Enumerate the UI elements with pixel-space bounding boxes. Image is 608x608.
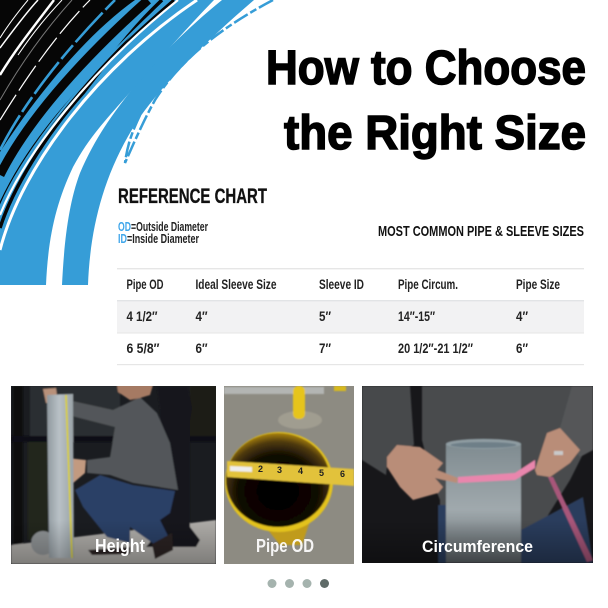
label: pipe OD: Pipe OD <box>256 536 314 556</box>
table header row: Pipe OD <box>126 277 164 292</box>
table row 6 inch: 6″ <box>196 341 208 356</box>
carousel dots <box>268 579 329 588</box>
table row 4 inch: 4″ <box>516 309 528 324</box>
legend: abbreviations: OD=Outside Diameter <box>118 220 208 234</box>
table row 6 inch: 6 5/8″ <box>126 341 160 356</box>
table: sizes <box>117 268 584 365</box>
table row 4 inch: 14″-15″ <box>398 309 435 324</box>
table row 6 inch: 7″ <box>319 341 331 356</box>
photo: measuring circumference <box>362 386 593 563</box>
tape digits: 4 <box>298 466 303 476</box>
table row 6 inch <box>126 341 528 356</box>
table header row <box>126 277 560 292</box>
title: the Right Size <box>284 107 586 160</box>
table row 4 inch: 5″ <box>319 309 331 324</box>
table header row: Sleeve ID <box>319 277 364 292</box>
legend: abbreviations <box>118 220 208 246</box>
background brush swoosh <box>0 0 273 285</box>
label: height: Height <box>95 536 145 556</box>
label: circumference: Circumference <box>422 537 533 556</box>
table row 6 inch: 6″ <box>516 341 528 356</box>
legend: abbreviations: ID=Inside Diameter <box>118 232 199 246</box>
title: How to Choose <box>266 42 586 95</box>
tape digits: 3 <box>277 465 282 475</box>
tape digits <box>258 466 345 477</box>
tape digits: 6 <box>340 469 345 479</box>
heading: reference chart: REFERENCE CHART <box>118 185 267 208</box>
table row 6 inch: 20 1/2″-21 1/2″ <box>398 341 473 356</box>
photo: measuring height <box>11 385 216 564</box>
photo: measuring pipe OD <box>224 386 354 564</box>
table row 4 inch: 4 1/2″ <box>126 309 158 324</box>
title <box>266 42 586 160</box>
tape digits: 2 <box>258 464 263 474</box>
table header row: Ideal Sleeve Size <box>196 277 277 292</box>
table row 4 inch <box>126 309 528 324</box>
tape digits: 5 <box>319 468 324 478</box>
table header row: Pipe Size <box>516 277 560 292</box>
table row 4 inch: 4″ <box>196 309 208 324</box>
table header row: Pipe Circum. <box>398 277 458 292</box>
